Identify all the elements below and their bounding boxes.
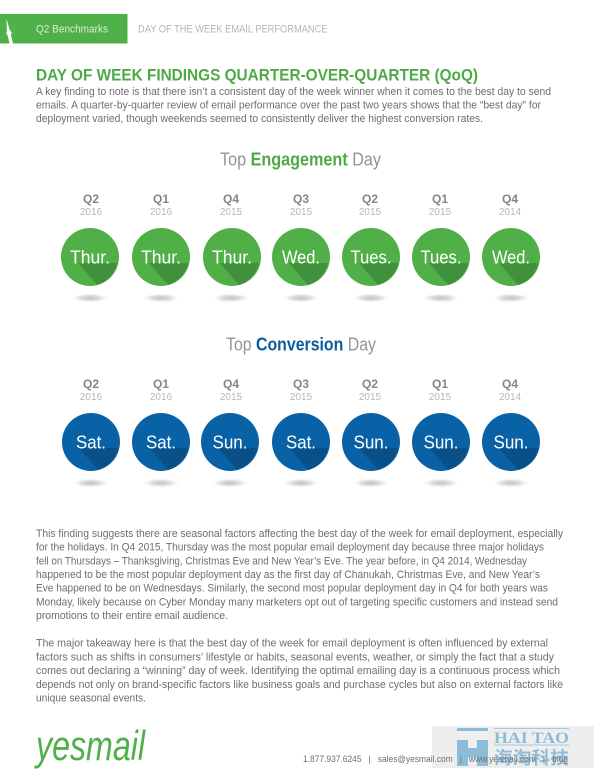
conversion badge: Q2 2015 (342, 413, 400, 471)
conversion quarter row: 2016 (80, 392, 103, 403)
yesmail logo: yesmail (34, 722, 146, 769)
conversion quarter row: Q2 (362, 377, 378, 391)
conversion quarter row: Q3 (293, 377, 309, 391)
conversion quarter row (80, 377, 522, 403)
body paragraph: seasonal factors: happened to be the most popular deployment day as the first day of Chanukah, Christmas Eve, and New Year’s (36, 569, 540, 581)
header tab (0, 14, 128, 44)
conversion quarter row: 2015 (359, 392, 382, 403)
body paragraph: major takeaway: The major takeaway here is that the best day of the week for email deployment is often influenced by external (36, 638, 548, 650)
conversion badge: Q4 2015 (201, 413, 259, 471)
watermark: Hai Tao (432, 726, 594, 770)
engagement quarter row: 2016 (80, 207, 103, 218)
conversion badge: Q2 2015: Sun. (354, 432, 388, 452)
watermark: Hai Tao: 海淘科技 (494, 745, 570, 770)
body paragraph: major takeaway: factors such as shifts in consumers’ lifestyle or habits, seasonal events, weather, or simply the fact that a study (36, 652, 554, 664)
engagement badge: Q1 2015: Tues. (420, 246, 462, 268)
intro paragraph: emails. A quarter-by-quarter review of email performance over the past two years shows that the “best day” for (36, 100, 541, 112)
body paragraph: seasonal factors: This finding suggests there are seasonal factors affecting the best day of the week for email deployment, especially (36, 528, 563, 540)
engagement quarter row (80, 192, 522, 218)
intro paragraph: A key finding to note is that there isn’t a consistent day of the week winner when it comes to the best day to send (36, 86, 551, 98)
body paragraph: major takeaway (36, 638, 563, 704)
engagement quarter row: 2015 (220, 207, 243, 218)
conversion badge: Q3 2015: Sat. (286, 432, 316, 452)
main heading: DAY OF WEEK FINDINGS QUARTER-OVER-QUARTER (QoQ) (36, 66, 478, 84)
header tab label: Q2 Benchmarks (36, 24, 108, 36)
header section title: DAY OF THE WEEK EMAIL PERFORMANCE (138, 24, 328, 36)
conversion badge: Q4 2014 (482, 413, 540, 471)
heading: top engagement day: Top Engagement Day (220, 150, 381, 170)
conversion quarter row: Q1 (432, 377, 448, 391)
engagement quarter row: Q1 (432, 192, 448, 206)
body paragraph: seasonal factors: Eve happened to be on Wednesdays. Similarly, the second most popular deployment day in Q4 for both years was (36, 582, 548, 594)
engagement quarter row: Q3 (293, 192, 309, 206)
conversion quarter row: Q4 (223, 377, 239, 391)
conversion quarter row: Q2 (83, 377, 99, 391)
intro paragraph: deployment varied, though weekends seemed to consistently deliver the highest conversion rates. (36, 113, 483, 125)
conversion quarter row: 2015 (429, 392, 452, 403)
heading: top conversion day: Top Conversion Day (226, 334, 376, 354)
body paragraph: seasonal factors: promotions to their entire email audience. (36, 610, 228, 622)
engagement quarter row: 2014 (499, 207, 522, 218)
engagement quarter row: Q2 (362, 192, 378, 206)
conversion badge: Q1 2015 (412, 413, 470, 471)
watermark: Hai Tao: HAI TAO (494, 730, 569, 747)
conversion badge: Q1 2016 (132, 413, 190, 471)
conversion quarter row: 2016 (150, 392, 173, 403)
body paragraph: seasonal factors: fell on Thursdays – Thanksgiving, Christmas Eve and New Year’s Eve. The year before, in Q4 2014, Wednesday (36, 556, 527, 568)
engagement quarter row: Q2 (83, 192, 99, 206)
engagement badge: Q3 2015: Wed. (282, 246, 320, 268)
engagement badge: Q2 2015 (342, 228, 400, 286)
body paragraph: major takeaway: unique seasonal events. (36, 692, 146, 704)
engagement badge: Q1 2015 (412, 228, 470, 286)
body paragraph: seasonal factors (36, 528, 563, 622)
conversion quarter row: Q4 (502, 377, 518, 391)
engagement quarter row: 2015 (359, 207, 382, 218)
engagement quarter row: 2015 (429, 207, 452, 218)
engagement quarter row: 2016 (150, 207, 173, 218)
icon: compass needle (1, 18, 17, 44)
conversion quarter row: 2015 (290, 392, 313, 403)
engagement badge: Q1 2016: Thur. (141, 246, 181, 268)
engagement badge: Q1 2016 (132, 228, 190, 286)
conversion badge: Q4 2014: Sun. (494, 432, 528, 452)
engagement badge: Q4 2015: Thur. (212, 246, 252, 268)
engagement quarter row: Q4 (223, 192, 239, 206)
engagement badge: Q2 2016: Thur. (70, 246, 110, 268)
engagement badge: Q2 2016 (61, 228, 119, 286)
intro paragraph (36, 86, 551, 125)
body paragraph: seasonal factors: Monday, likely because on Cyber Monday many marketers opt out of targeting specific customers and instead send (36, 596, 558, 608)
engagement badge: Q3 2015 (272, 228, 330, 286)
conversion quarter row: 2014 (499, 392, 522, 403)
engagement badge: Q4 2014: Wed. (492, 246, 530, 268)
engagement badge: Q4 2015 (203, 228, 261, 286)
engagement quarter row: 2015 (290, 207, 313, 218)
body paragraph: major takeaway: depends not only on brand-specific factors like business goals and purchase cycles but also on external factors like (36, 679, 563, 691)
conversion badge: Q2 2016 (62, 413, 120, 471)
conversion quarter row: 2015 (220, 392, 243, 403)
body paragraph: seasonal factors: for the holidays. In Q4 2015, Thursday was the most popular email deployment day because three major holidays (36, 542, 544, 554)
footer contact line: 1.877.937.6245 | sales@yesmail.com | www.yesmail.com | blog (303, 754, 568, 764)
conversion badge: Q4 2015: Sun. (212, 432, 248, 452)
conversion badge: Q1 2016: Sat. (146, 432, 176, 452)
conversion badge: Q3 2015 (272, 413, 330, 471)
body paragraph: major takeaway: comes out declaring a “winning” day of week. Identifying the optimal emailing day is a continuous process which (36, 665, 560, 677)
engagement quarter row: Q1 (153, 192, 169, 206)
conversion badge: Q1 2015: Sun. (424, 432, 458, 452)
conversion quarter row: Q1 (153, 377, 169, 391)
engagement quarter row: Q4 (502, 192, 518, 206)
engagement badge: Q2 2015: Tues. (350, 246, 392, 268)
engagement badge: Q4 2014 (482, 228, 540, 286)
conversion badge: Q2 2016: Sat. (76, 432, 106, 452)
